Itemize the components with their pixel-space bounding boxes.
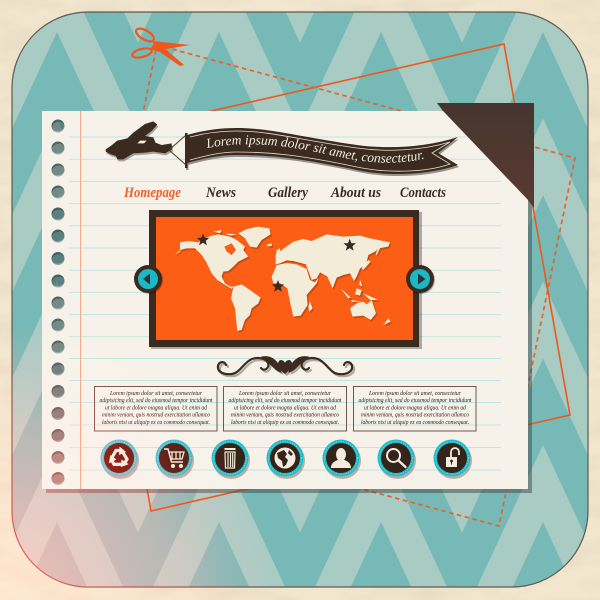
icon: recycle bbox=[100, 440, 139, 479]
heart bbox=[278, 360, 292, 374]
hole shading bbox=[52, 120, 64, 485]
navigation menu: Homepage bbox=[123, 185, 181, 201]
panel: notebook paper bbox=[42, 111, 532, 493]
icon: open lock bbox=[434, 440, 472, 479]
icon: magnifier bbox=[378, 440, 416, 479]
navigation menu bbox=[123, 185, 446, 201]
text box 2: ut labore et dolore magna aliqua. Ut enim ad bbox=[234, 406, 336, 412]
text box 3: laboris nisi ut aliquip ex ea commodo consequat. bbox=[361, 420, 469, 426]
text box 1: minim veniam, quis nostrud exercitation ullamco bbox=[102, 412, 210, 418]
text box 3: ut labore et dolore magna aliqua. Ut enim ad bbox=[364, 406, 466, 412]
text box 3: minim veniam, quis nostrud exercitation ullamco bbox=[361, 412, 469, 418]
banner text: Lorem ipsum dolor sit amet, consectetur. bbox=[206, 135, 424, 163]
text box 3: Lorem ipsum dolor sit amet, consectetur bbox=[368, 391, 462, 397]
paper shadow bbox=[46, 115, 532, 493]
panel: brown page corner bbox=[437, 103, 534, 208]
icon: right arrow button bbox=[406, 265, 435, 294]
text box 1: ut labore et dolore magna aliqua. Ut enim ad bbox=[105, 406, 207, 412]
text box 1: adipisicing elit, sed do eiusmod tempor incididunt bbox=[100, 398, 213, 404]
text box 2 bbox=[224, 386, 346, 431]
paper sheet with punched holes bbox=[42, 111, 528, 489]
icon: biplane bbox=[106, 121, 172, 159]
text box 2: laboris nisi ut aliquip ex ea commodo consequat. bbox=[231, 420, 339, 426]
dashed orange cut line bbox=[81, 45, 575, 526]
ruled lines bbox=[69, 137, 501, 470]
world map bbox=[175, 227, 391, 331]
navigation menu: News bbox=[205, 185, 236, 201]
map stars bbox=[197, 234, 356, 292]
text box 3 bbox=[354, 386, 476, 431]
icon: person bbox=[322, 440, 361, 479]
text box 2: Lorem ipsum dolor sit amet, consectetur bbox=[238, 391, 332, 397]
navigation menu: Gallery bbox=[268, 185, 308, 201]
icon: left arrow button bbox=[134, 265, 163, 294]
text box 2: minim veniam, quis nostrud exercitation ullamco bbox=[231, 412, 339, 418]
text box 2: adipisicing elit, sed do eiusmod tempor incididunt bbox=[228, 398, 342, 404]
icon: trash bbox=[212, 440, 250, 479]
text box 1: laboris nisi ut aliquip ex ea commodo consequat. bbox=[102, 420, 210, 426]
navigation menu: About us bbox=[330, 185, 381, 201]
text box 1: Lorem ipsum dolor sit amet, consectetur bbox=[109, 391, 203, 397]
panel: world map frame bbox=[149, 210, 422, 349]
icon: scissors bbox=[131, 26, 190, 66]
ornamental flourish with heart bbox=[218, 357, 352, 374]
navigation menu: Contacts bbox=[400, 185, 446, 201]
icon: cart bbox=[156, 440, 194, 479]
solid orange rectangle outline bbox=[85, 44, 570, 511]
text box 1 bbox=[94, 386, 217, 431]
icon: globe bbox=[266, 440, 305, 479]
margin line bbox=[80, 111, 82, 489]
banner ribbon bbox=[185, 128, 459, 176]
text box 3: adipisicing elit, sed do eiusmod tempor incididunt bbox=[358, 398, 472, 404]
tow ropes bbox=[169, 135, 186, 165]
